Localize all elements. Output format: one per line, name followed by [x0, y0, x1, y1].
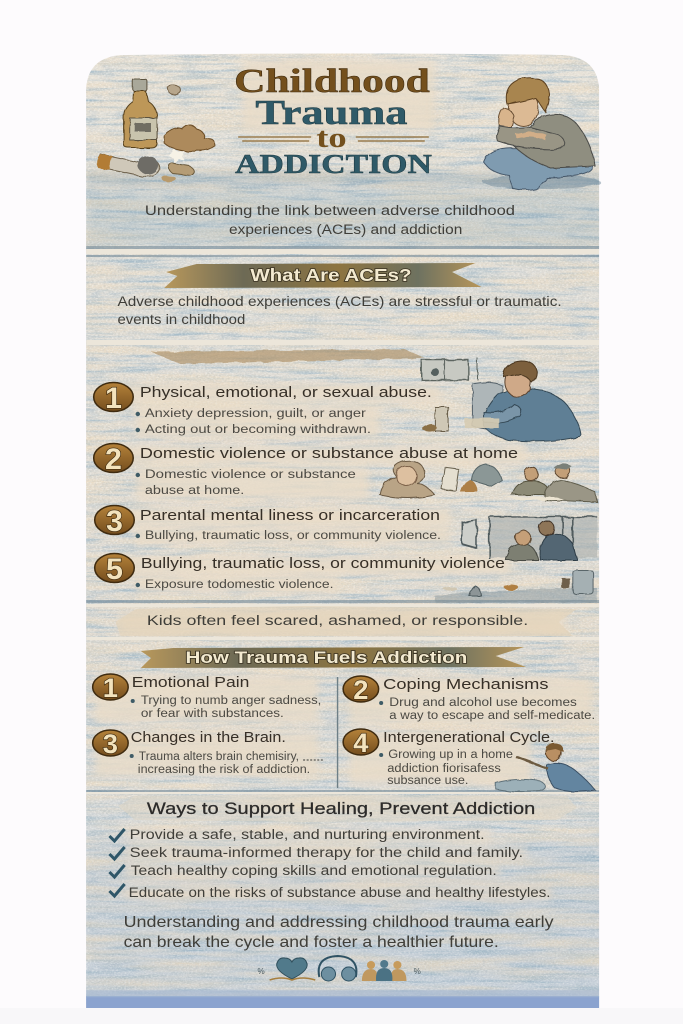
- number badge 5: [95, 553, 134, 586]
- card 3: changes in the brain: increasing the risk of addiction.: [138, 764, 310, 776]
- closing statement: [124, 914, 554, 951]
- illustration: scattered belongings: [435, 570, 597, 602]
- card 4: intergenerational cycle: Growing up in a home: [388, 749, 513, 761]
- panel: textured parchment background: [80, 50, 607, 1010]
- icon: small marks: %: [257, 967, 265, 976]
- check item 2: Seek trauma-informed therapy for the child and family.: [130, 844, 523, 860]
- card 3: changes in the brain: Changes in the Brain.: [131, 730, 286, 746]
- number badge 3: 3: [106, 505, 123, 538]
- card 1: emotional pain: or fear with substances.: [141, 708, 284, 720]
- number badge 1: 1: [105, 382, 122, 415]
- card 2: coping mechanisms: a way to escape and self-medicate.: [389, 710, 595, 722]
- checklist: support actions: [109, 826, 550, 900]
- section banner: What Are ACEs?: What Are ACEs?: [250, 265, 412, 285]
- check item 4: Educate on the risks of substance abuse and healthy lifestyles.: [129, 884, 550, 900]
- title: Trauma: [255, 93, 408, 132]
- illustration: child drawing on the floor: [496, 743, 595, 792]
- number badge 1: [94, 382, 133, 415]
- illustration: spilled pills and rocks: [97, 86, 215, 182]
- card 2: coping mechanisms: Coping Mechanisms: [383, 677, 548, 693]
- panel: how trauma fuels addiction: [93, 672, 595, 788]
- check item 3: Teach healthy coping skills and emotional regulation.: [131, 862, 497, 878]
- icon: small marks: [257, 967, 421, 976]
- list item 3: parental illness: Parental mental liness or incarceration: [140, 508, 440, 524]
- list item 2: domestic violence: abuse at home.: [145, 485, 244, 497]
- text block: ACEs definition: Adverse childhood experiences (ACEs) are stressful or traumatic.: [118, 294, 562, 309]
- card 4: intergenerational cycle: [343, 727, 555, 787]
- icon: headphones: [319, 956, 356, 981]
- illustration: family scene at table: [380, 461, 597, 502]
- callout: how kids feel: Kids often feel scared, ashamed, or responsible.: [147, 612, 528, 628]
- heading: ways to support healing: Ways to Support Healing, Prevent Addiction: [147, 799, 535, 818]
- icon: small marks: %: [414, 967, 421, 976]
- list item 2: domestic violence: Domestic violence or substance: [145, 469, 356, 481]
- illustration: two people at barred window: [462, 517, 597, 560]
- list item 5: bullying: [95, 553, 505, 591]
- title: Childhood: [234, 62, 430, 100]
- number badge 3: [95, 505, 134, 538]
- icon row: healing symbols: [257, 956, 421, 981]
- card 4: intergenerational cycle: Intergenerational Cycle.: [383, 730, 555, 746]
- list item 2: domestic violence: Domestic violence or substance abuse at home: [140, 446, 518, 462]
- list item 1: abuse: Anxiety depression, guilt, or anger: [145, 408, 366, 420]
- number badge 5: 5: [106, 553, 123, 586]
- card 3: changes in the brain: 3: [103, 728, 118, 759]
- title: [234, 62, 432, 179]
- card 1: emotional pain: [93, 672, 321, 720]
- card 1: emotional pain: 1: [103, 672, 118, 703]
- illustration: medicine bottle: [124, 79, 157, 148]
- card 3: changes in the brain: Trauma alters brain chemisiry,: [139, 751, 299, 763]
- list item 1: abuse: [94, 382, 432, 436]
- card 4: intergenerational cycle: addiction fiorisafess: [387, 763, 501, 775]
- card 1: emotional pain: Trying to numb anger sadness,: [141, 695, 321, 707]
- subtitle: Understanding the link between adverse childhood: [145, 202, 515, 218]
- list item 3: parental illness: [95, 505, 441, 542]
- card 2: coping mechanisms: Drug and alcohol use becomes: [389, 697, 577, 709]
- list item 1: abuse: Acting out or becoming withdrawn.: [145, 424, 371, 436]
- illustration: boy with head in hand at window: [422, 358, 581, 441]
- card 1: emotional pain: Emotional Pain: [132, 675, 249, 691]
- card 3: changes in the brain: [93, 728, 323, 776]
- number badge 2: [94, 443, 133, 476]
- section banner: How Trauma Fuels Addiction: How Trauma Fuels Addiction: [185, 648, 467, 667]
- check item 1: Provide a safe, stable, and nurturing environment.: [130, 826, 485, 842]
- subtitle: [145, 202, 515, 237]
- text block: ACEs definition: events in childhood: [118, 312, 245, 327]
- subtitle: experiences (ACEs) and addiction: [229, 221, 462, 237]
- card 4: intergenerational cycle: 4: [353, 727, 368, 758]
- list item 5: bullying: Exposure todomestic violence.: [145, 579, 334, 591]
- closing statement: Understanding and addressing childhood trauma early: [124, 914, 554, 931]
- closing statement: can break the cycle and foster a healthier future.: [124, 934, 499, 951]
- text block: ACEs definition: [118, 294, 562, 327]
- title: ADDICTION: [235, 149, 432, 179]
- card 4: intergenerational cycle: subsance use.: [387, 775, 468, 787]
- number badge 2: 2: [105, 443, 122, 476]
- list item 1: abuse: Physical, emotional, or sexual abuse.: [140, 385, 432, 401]
- icon: family group: [362, 960, 407, 981]
- illustration: sad boy sitting: [483, 78, 600, 190]
- list item 5: bullying: Bullying, traumatic loss, or community violence: [141, 556, 505, 572]
- section banner: What Are ACEs?: [164, 263, 482, 288]
- title: to: [316, 122, 347, 154]
- section banner: How Trauma Fuels Addiction: [141, 647, 526, 668]
- callout: how kids feel: [115, 606, 577, 636]
- heading: ways to support healing: [119, 794, 577, 822]
- list item 3: parental illness: Bullying, traumatic loss, or community violence.: [145, 530, 441, 542]
- list item 2: domestic violence: [94, 443, 518, 497]
- card 2: coping mechanisms: [343, 674, 595, 722]
- icon: heart on book: [270, 958, 315, 980]
- card 2: coping mechanisms: 2: [353, 674, 368, 705]
